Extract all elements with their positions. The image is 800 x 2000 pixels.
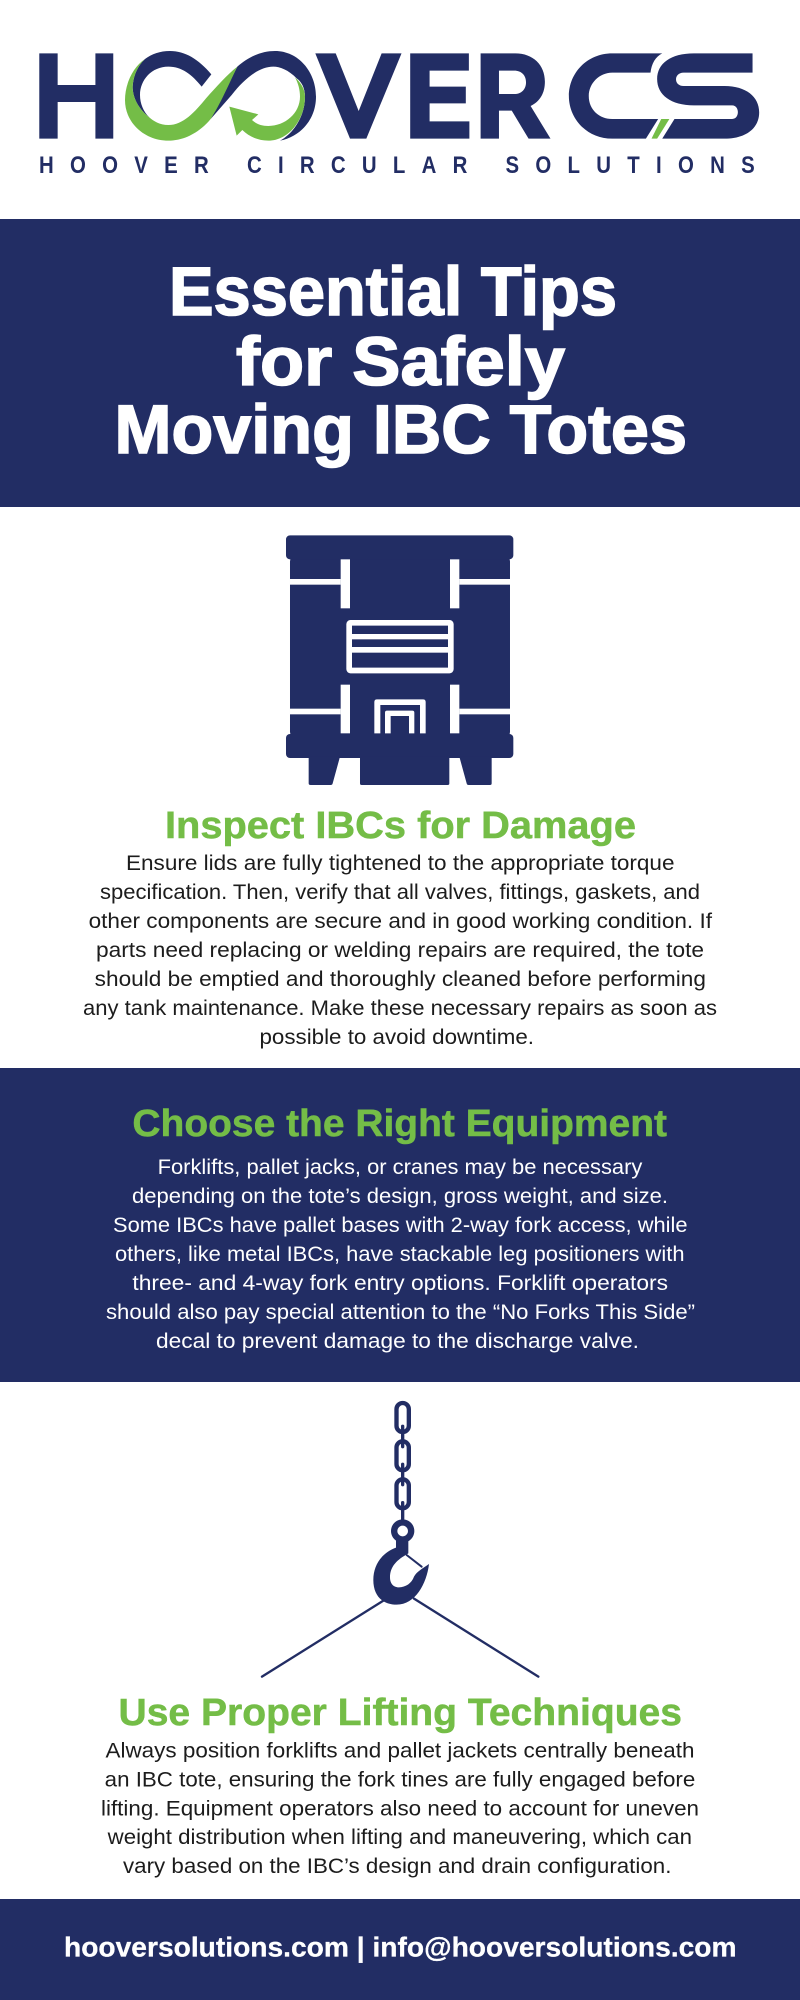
text block: inspect IBCs: other components are secure and in good working condition. If xyxy=(89,910,712,933)
heading: choose equipment: Choose the Right Equipment xyxy=(132,1103,667,1145)
title: for Safely xyxy=(236,323,565,400)
panel: title banner xyxy=(0,219,800,507)
text block: choose equipment: Forklifts, pallet jacks, or cranes may be necessary xyxy=(158,1156,643,1179)
text block: lifting techniques: lifting. Equipment operators also need to account for uneven xyxy=(101,1797,699,1820)
text block: choose equipment: decal to prevent damage to the discharge valve. xyxy=(156,1330,639,1353)
panel: inspect IBCs for damage xyxy=(83,535,717,1049)
icon: chain and hook with slings xyxy=(262,1403,538,1677)
text block: choose equipment: three- and 4-way fork entry options. Forklift operators xyxy=(132,1272,668,1295)
text block: choose equipment xyxy=(106,1156,695,1353)
text block: inspect IBCs: Ensure lids are fully tightened to the appropriate torque xyxy=(126,852,674,875)
text block: choose equipment: depending on the tote’s design, gross weight, and size. xyxy=(132,1185,668,1208)
text block: inspect IBCs: possible to avoid downtime. xyxy=(260,1026,534,1049)
text block: inspect IBCs: any tank maintenance. Make these necessary repairs as soon as xyxy=(83,997,717,1020)
text block: inspect IBCs: should be emptied and thoroughly cleaned before performing xyxy=(95,968,706,991)
title: Essential Tips xyxy=(169,253,617,330)
logo: Hoover Circular Solutions: HOOVER CIRCULAR SOLUTIONS xyxy=(39,151,755,178)
panel: choose the right equipment xyxy=(0,1068,800,1382)
text block: lifting techniques: Always position forklifts and pallet jackets centrally beneath xyxy=(106,1739,694,1762)
text block: choose equipment: others, like metal IBCs, have stackable leg positioners with xyxy=(115,1243,684,1266)
title xyxy=(114,253,687,468)
text block: lifting techniques: an IBC tote, ensuring the fork tines are fully engaged before xyxy=(105,1768,695,1791)
text block: lifting techniques: weight distribution when lifting and maneuvering, which can xyxy=(107,1826,692,1849)
text block: lifting techniques: vary based on the IBC’s design and drain configuration. xyxy=(123,1855,671,1878)
title: Moving IBC Totes xyxy=(114,391,687,468)
logo: Hoover Circular Solutions xyxy=(39,51,759,178)
text block: inspect IBCs: specification. Then, verify that all valves, fittings, gaskets, and xyxy=(100,881,700,904)
text block: choose equipment: Some IBCs have pallet bases with 2-way fork access, while xyxy=(113,1214,687,1237)
text block: inspect IBCs xyxy=(83,852,717,1049)
icon: IBC tote xyxy=(286,535,513,785)
panel: use proper lifting techniques xyxy=(101,1403,699,1878)
text block: lifting techniques xyxy=(101,1739,699,1878)
footer contact text: hooversolutions.com | info@hooversolutions.com xyxy=(64,1932,737,1963)
heading: inspect IBCs: Inspect IBCs for Damage xyxy=(165,805,636,847)
text block: choose equipment: should also pay special attention to the “No Forks This Side” xyxy=(106,1301,695,1324)
text block: inspect IBCs: parts need replacing or welding repairs are required, the tote xyxy=(96,939,704,962)
panel: footer xyxy=(0,1899,800,2000)
heading: lifting techniques: Use Proper Lifting Techniques xyxy=(118,1692,682,1734)
